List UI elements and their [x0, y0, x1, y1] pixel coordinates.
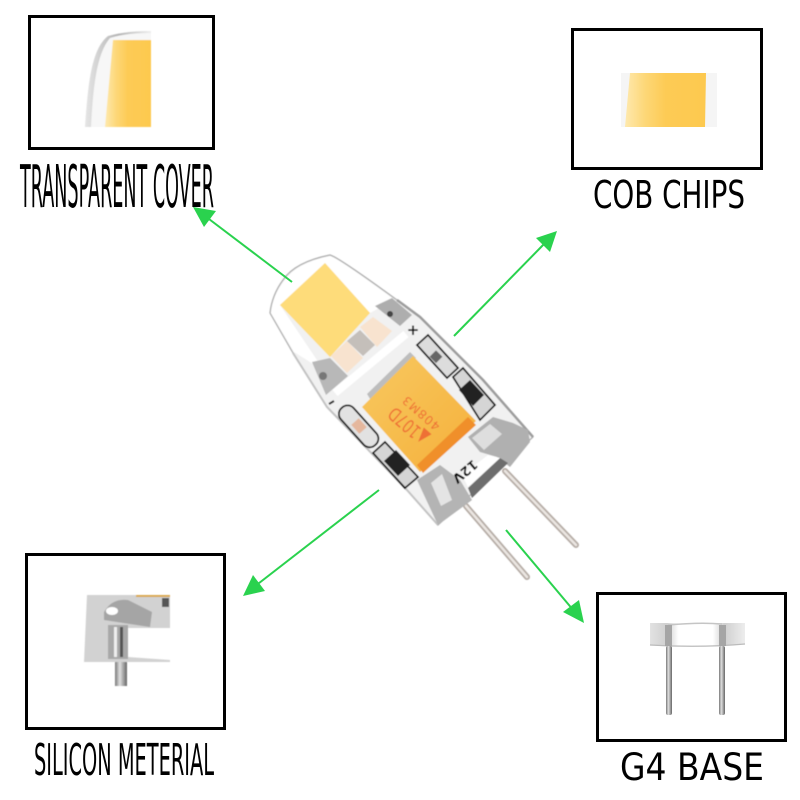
plus marker: + [407, 321, 419, 339]
top dome highlight [271, 256, 396, 372]
inset image: chip close-up [621, 73, 717, 127]
arrow: to cob chips [454, 231, 557, 336]
label: g4 base: G4 BASE [620, 746, 764, 789]
silver block highlights left [431, 474, 452, 506]
panel: silicon material [26, 554, 224, 786]
component: lower diode [373, 442, 418, 488]
silver mottling beside capacitor [367, 352, 416, 402]
illustration: G4 LED bulb [270, 255, 576, 577]
minus marker [329, 401, 334, 404]
inset frame: g4 base [598, 594, 786, 740]
text: TRANSPARENT COVER [20, 152, 214, 221]
chip contact strips [331, 317, 392, 373]
silver block highlights right [472, 424, 502, 450]
lead frame window [462, 455, 500, 487]
label: cob chips: COB CHIPS [593, 173, 745, 217]
inset image: silicone corner close-up [84, 595, 170, 686]
inset image: cover edge close-up [85, 31, 151, 127]
PCB silver pads near chip [375, 298, 412, 326]
panel: cob chips [572, 30, 762, 217]
component: capsule resistor [336, 402, 382, 451]
left edge shading [293, 353, 438, 525]
silver solder block right [468, 417, 530, 467]
silver solder block left [417, 465, 472, 525]
inset image: base with two pins [650, 623, 745, 715]
arrow: to transparent cover [193, 207, 292, 282]
capacitor marking: ▲107D [384, 402, 433, 449]
lead frame strip [468, 458, 508, 498]
arrow: to g4 base [506, 530, 584, 623]
capacitor [362, 356, 476, 473]
right edge shading [397, 300, 533, 437]
capacitor code: 408M3 [399, 393, 443, 433]
inset frame: silicon material [26, 554, 224, 728]
panel: g4 base [598, 594, 786, 789]
component: small resistor [417, 335, 458, 378]
COB chip [280, 263, 370, 357]
component: upper diode [453, 368, 495, 420]
PCB white band [335, 334, 406, 393]
panel: transparent cover [20, 16, 214, 221]
inset frame: cob chips [572, 30, 762, 168]
arrow: to silicon material [243, 490, 379, 596]
bulb silicone body [270, 255, 533, 525]
bulb pins [466, 471, 576, 577]
text: SILICON METERIAL [34, 735, 214, 786]
voltage marking: 12V [449, 456, 480, 486]
inset frame: transparent cover [30, 16, 214, 148]
